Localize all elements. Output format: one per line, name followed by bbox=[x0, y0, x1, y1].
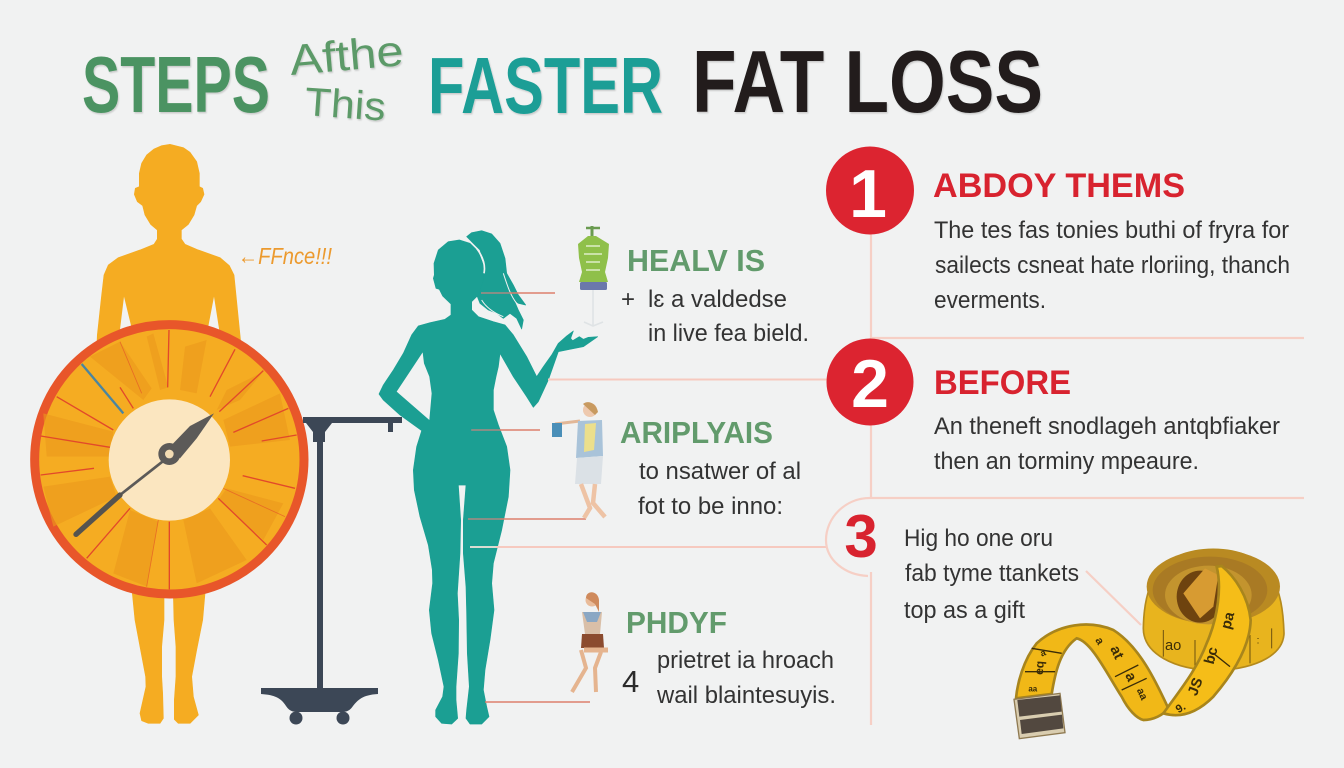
step 3 text bbox=[904, 525, 1079, 624]
tape markings: pa bbox=[1218, 610, 1239, 631]
step 1 badge: 1 bbox=[849, 156, 887, 232]
step 3 text: top as a gift bbox=[904, 597, 1025, 624]
step 1 text: sailects csneat hate rloriing, thanch bbox=[935, 252, 1290, 279]
icon: measuring tape bbox=[1014, 549, 1284, 739]
step 1 text bbox=[934, 217, 1290, 314]
text: phdyf body: wail blaintesuyis. bbox=[656, 682, 836, 709]
step 1 text: The tes fas tonies buthi of fryra for bbox=[934, 217, 1289, 244]
icon: woman holding bag bbox=[552, 402, 605, 518]
text: phdyf body bbox=[622, 647, 836, 709]
orange body silhouette bbox=[96, 144, 243, 368]
tape coil bbox=[1143, 549, 1284, 671]
text: healvis body: in live fea bield. bbox=[648, 320, 809, 347]
title: Afthe bbox=[288, 27, 405, 85]
step 2 heading: BEFORE bbox=[934, 364, 1071, 402]
text: applyais body: fot to be inno: bbox=[638, 493, 783, 520]
text: healvis body: lɛ a valdedse bbox=[648, 286, 787, 313]
title: FASTER bbox=[428, 41, 663, 130]
step 3 text: Hig ho one oru bbox=[904, 525, 1053, 552]
title bbox=[82, 27, 1043, 131]
title: This bbox=[303, 80, 387, 130]
heading: applyais: ARIPLYAIS bbox=[620, 415, 773, 450]
step 1 badge bbox=[826, 146, 914, 234]
tape markings: 9. bbox=[1174, 701, 1188, 716]
step connector lines bbox=[826, 234, 1304, 725]
text: healvis body bbox=[621, 286, 809, 347]
tape band front bbox=[1163, 566, 1251, 715]
step 3 number: 3 bbox=[844, 503, 878, 570]
text: applyais body bbox=[638, 458, 801, 520]
text: phdyf body: prietret ia hroach bbox=[657, 647, 834, 674]
icon: woman in shorts bbox=[572, 592, 608, 692]
icon: measuring tape: : bbox=[1257, 635, 1259, 646]
tape markings: a bbox=[1039, 647, 1048, 659]
tape markings: aa bbox=[1028, 685, 1038, 694]
tape markings: a bbox=[1121, 670, 1140, 685]
tape metal buckle bbox=[1014, 693, 1065, 739]
tape band loop bbox=[1016, 625, 1168, 720]
gauge red ticks bbox=[41, 330, 297, 589]
text: applyais body: to nsatwer of al bbox=[639, 458, 801, 485]
step 3 text: fab tyme ttankets bbox=[905, 560, 1079, 587]
arrow note: ←FFnce!!! bbox=[238, 243, 333, 269]
gauge centre dial bbox=[109, 399, 230, 521]
step 2 text bbox=[934, 413, 1280, 475]
gauge shaded wedges bbox=[43, 333, 290, 587]
tape markings: bc bbox=[1202, 645, 1222, 666]
text: healvis body: + bbox=[621, 286, 635, 313]
tape markings: a bbox=[1092, 635, 1106, 648]
gauge needle bbox=[76, 413, 214, 534]
title: FAT LOSS bbox=[692, 32, 1043, 131]
scale stand bbox=[261, 417, 402, 724]
step 2 text: then an torminy mpeaure. bbox=[934, 448, 1199, 475]
gauge blue tick bbox=[82, 364, 123, 413]
leader lines from woman bbox=[468, 293, 827, 702]
tape markings: at bbox=[1106, 643, 1126, 662]
heading: phdyf: PHDYF bbox=[626, 605, 727, 640]
tape markings: aa bbox=[1134, 686, 1150, 702]
step 1 text: everments. bbox=[934, 287, 1046, 314]
step 2 text: An theneft snodlageh antqbfiaker bbox=[934, 413, 1280, 440]
tape markings: JS bbox=[1185, 676, 1207, 698]
text: phdyf body: 4 bbox=[622, 664, 639, 699]
step 2 badge: 2 bbox=[851, 346, 889, 422]
teal woman silhouette bbox=[379, 231, 598, 724]
title: STEPS bbox=[82, 40, 270, 129]
icon: green mannequin bbox=[578, 226, 609, 326]
orange legs bbox=[132, 593, 205, 723]
gauge wheel bbox=[35, 325, 304, 594]
tape markings: eq bbox=[1032, 660, 1047, 675]
step 2 badge bbox=[826, 338, 914, 426]
tape markings bbox=[1028, 610, 1239, 716]
heading: healvis: HEALV IS bbox=[627, 243, 765, 278]
step 1 heading: ABDOY THEMS bbox=[933, 167, 1185, 205]
icon: measuring tape: ao bbox=[1165, 638, 1181, 654]
